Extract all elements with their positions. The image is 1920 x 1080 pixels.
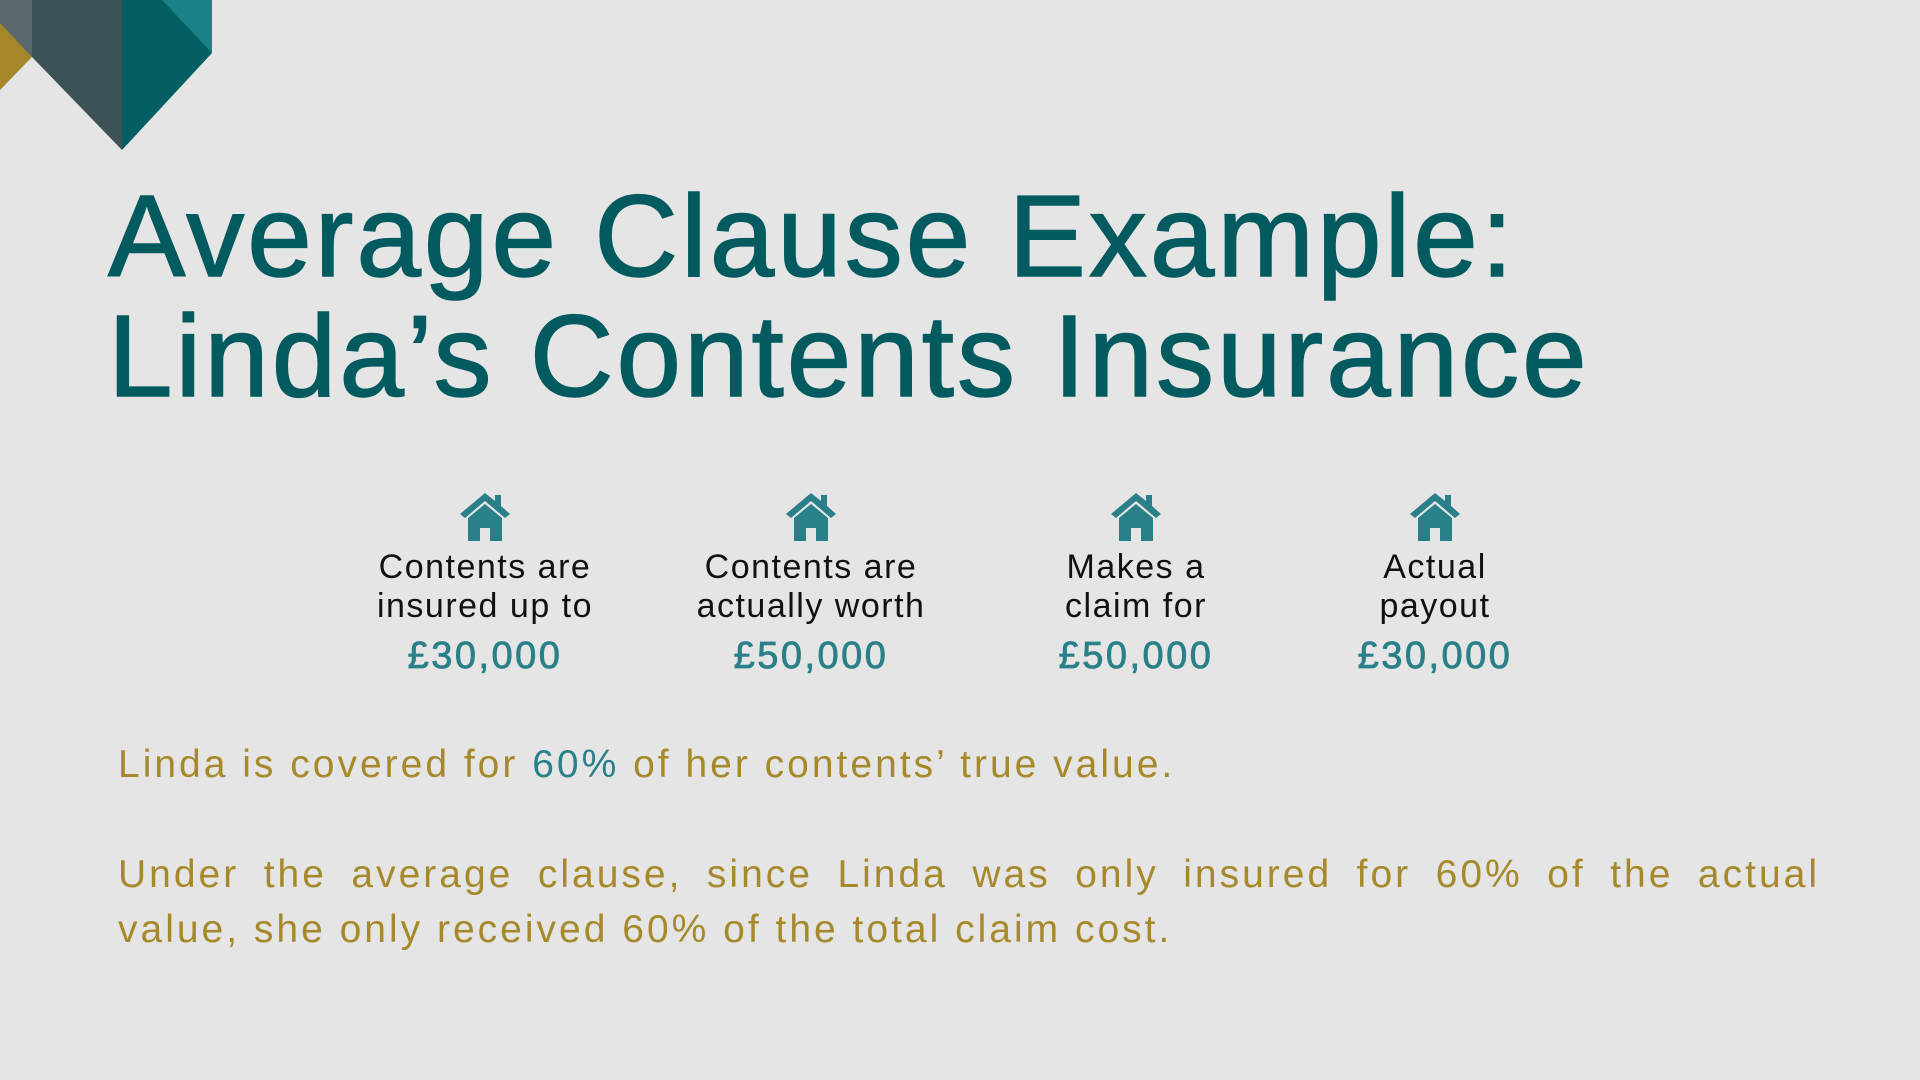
column: worth: actually worth bbox=[697, 587, 925, 625]
icon: house bbox=[786, 493, 836, 541]
column: insured: Contents are bbox=[379, 548, 591, 586]
column: claim: claim for bbox=[1065, 587, 1207, 625]
column: claim bbox=[1059, 493, 1213, 677]
text: explanation bbox=[118, 853, 1820, 951]
column: worth: Contents are bbox=[705, 548, 917, 586]
text: coverage: Linda is covered for 60% of her contents’ true value. bbox=[118, 743, 1175, 786]
column: insured bbox=[377, 493, 593, 677]
column: claim: £50,000 bbox=[1059, 635, 1213, 677]
column: worth bbox=[697, 493, 925, 677]
column: payout: £30,000 bbox=[1358, 635, 1512, 677]
icon: house bbox=[1111, 493, 1161, 541]
column: payout: payout bbox=[1379, 587, 1491, 625]
title bbox=[107, 171, 1590, 421]
corner decoration bbox=[0, 0, 212, 150]
column: insured: insured up to bbox=[377, 587, 593, 625]
column: claim: Makes a bbox=[1066, 548, 1206, 586]
column: worth: £50,000 bbox=[734, 635, 888, 677]
icon: house bbox=[1410, 493, 1460, 541]
column: payout bbox=[1358, 493, 1512, 677]
column: payout: Actual bbox=[1383, 548, 1487, 586]
title: Linda’s Contents Insurance bbox=[108, 291, 1590, 421]
text: explanation: value, she only received 60% of the total claim cost. bbox=[118, 908, 1172, 951]
column: insured: £30,000 bbox=[408, 635, 562, 677]
text: explanation: Under the average clause, since Linda was only insured for 60% of the actual bbox=[118, 853, 1820, 896]
title: Average Clause Example: bbox=[108, 171, 1516, 301]
icon: house bbox=[460, 493, 510, 541]
